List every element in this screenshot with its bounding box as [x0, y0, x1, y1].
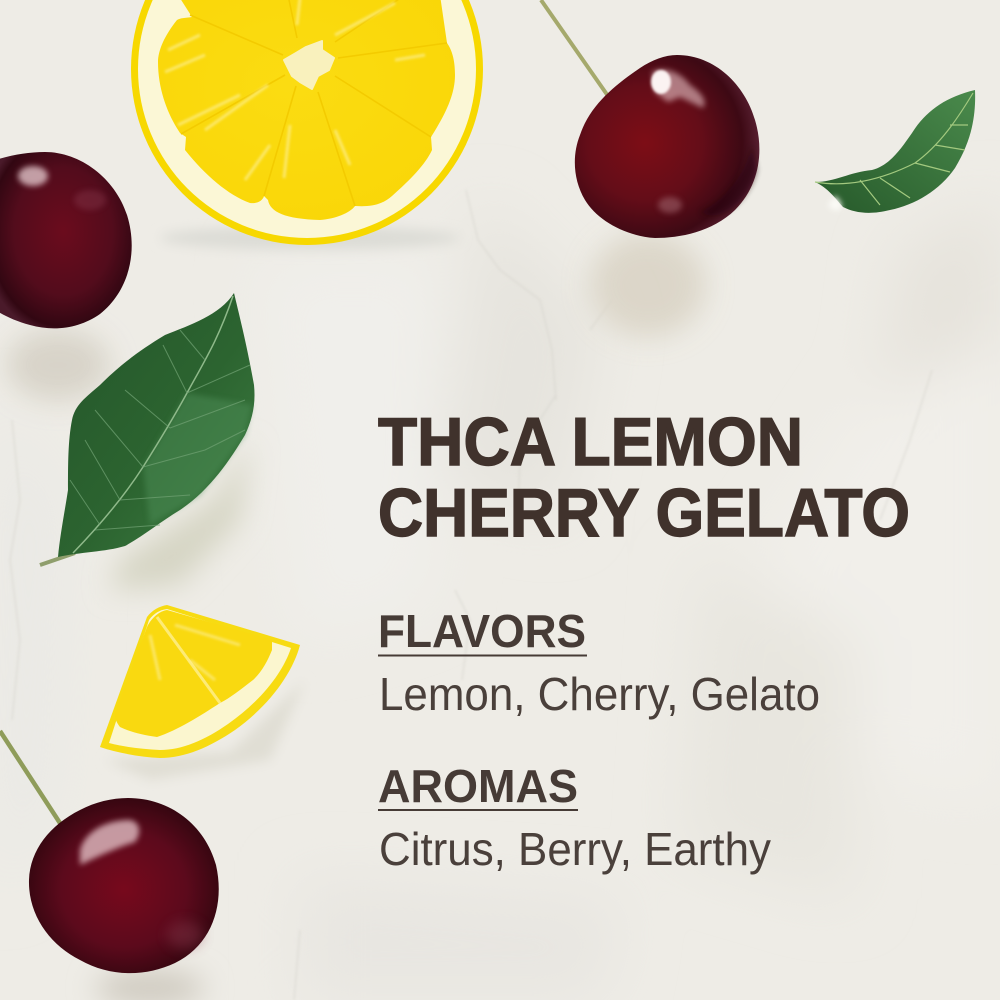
- text: flavors list: Lemon, Cherry, Gelato: [379, 668, 820, 720]
- cherry bottom: [0, 731, 219, 973]
- title: [378, 404, 910, 551]
- lemon wedge: [100, 605, 300, 758]
- stem: [541, 0, 608, 96]
- lemon core: [284, 41, 334, 89]
- large leaf: [40, 293, 255, 565]
- text: aromas list: Citrus, Berry, Earthy: [379, 823, 771, 875]
- lemon flesh: [158, 0, 455, 220]
- lemon slice: [131, 0, 483, 245]
- wedge flesh: [115, 610, 272, 737]
- title: THCA LEMON: [378, 404, 803, 480]
- stem: [40, 553, 75, 565]
- lemon segment lines: [181, 0, 447, 206]
- lighter patch: [143, 393, 252, 525]
- heading: flavors: FLAVORS: [378, 605, 586, 657]
- specular highlight: [652, 70, 705, 108]
- specular highlight: [80, 820, 139, 865]
- leaf top right: [815, 90, 975, 213]
- cherry top: [541, 0, 759, 238]
- lemon highlights: [165, 0, 425, 180]
- title: CHERRY GELATO: [378, 475, 910, 551]
- cherry left: [0, 152, 132, 328]
- specular highlight: [18, 166, 48, 186]
- shadows under fruit: [6, 226, 706, 1000]
- stem: [0, 731, 71, 840]
- heading: aromas: AROMAS: [378, 760, 578, 812]
